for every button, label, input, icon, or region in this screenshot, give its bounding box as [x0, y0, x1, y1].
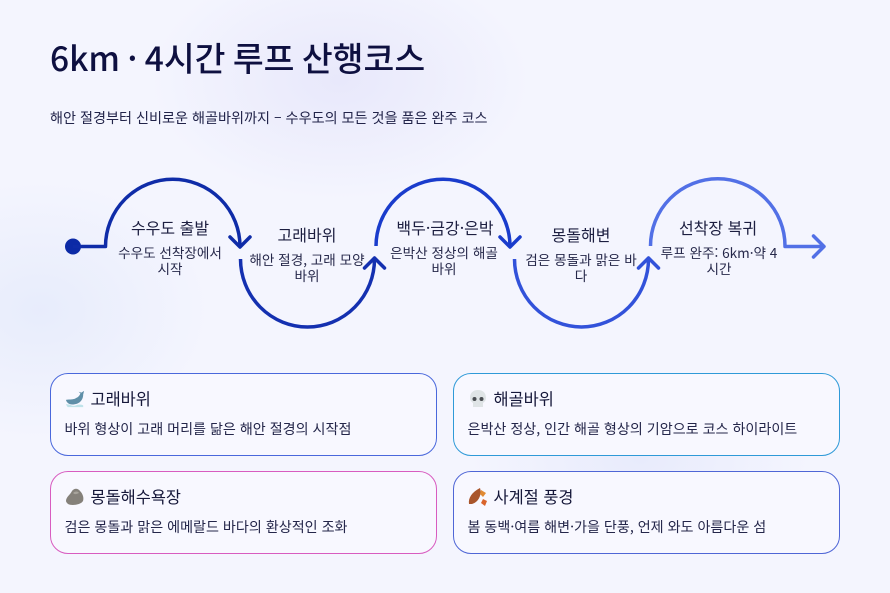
- step 4 description: [525, 248, 637, 285]
- card text: 검은 몽돌과 맑은 에메랄드 바다의 환상적인 조화: [64, 517, 348, 537]
- icon: fallen leaves: [468, 488, 487, 506]
- card: four seasons: [453, 471, 840, 554]
- step 4 heading: 몽돌해변: [552, 222, 610, 246]
- step 3 description: [390, 242, 498, 278]
- card heading: 사계절 풍경: [494, 484, 574, 508]
- step 3 heading: 백두·금강·은박: [396, 214, 494, 238]
- card text: 바위 형상이 고래 머리를 닮은 해안 절경의 시작점: [64, 419, 351, 439]
- icon: skull: [470, 390, 486, 407]
- route segment 1 with arrow: [73, 179, 250, 247]
- step 5 description: 루프 완주: 6km·약 4: [661, 242, 777, 262]
- route segment 3 with arrow: [376, 179, 520, 247]
- icon: whale: [66, 391, 84, 408]
- card heading: 고래바위: [90, 386, 151, 410]
- subtitle: 해안 절경부터 신비로운 해골바위까지 – 수우도의 모든 것을 품은 완주 코스: [50, 108, 487, 128]
- step 2 description: [249, 248, 365, 285]
- title: 6km · 4시간 루프 산행코스: [50, 32, 425, 81]
- step 2 heading: 고래바위: [278, 222, 336, 246]
- card: whale rock: [50, 373, 437, 456]
- step 1 description: [118, 242, 222, 278]
- icon: rock: [66, 488, 84, 505]
- step 5 description: 시간: [706, 258, 732, 278]
- step 1 description: 수우도 선착장에서: [118, 242, 222, 262]
- step 2 description: 해안 절경, 고래 모양: [249, 248, 365, 268]
- route segment 4 with arrow: [514, 258, 658, 327]
- step 5 description: [661, 242, 777, 278]
- step 5 heading: 선착장 복귀: [679, 214, 757, 238]
- step 3 description: 바위: [431, 258, 457, 278]
- card heading: 해골바위: [494, 386, 554, 410]
- card heading: 몽돌해수욕장: [90, 484, 181, 508]
- step 3 description: 은박산 정상의 해골: [390, 242, 498, 262]
- route segment 5 with arrow: [650, 179, 824, 257]
- card: skull rock: [453, 373, 840, 456]
- step 4 description: 검은 몽돌과 맑은 바: [525, 248, 637, 268]
- step 1 description: 시작: [157, 258, 183, 278]
- step 4 description: 다: [575, 265, 587, 285]
- card: pebble beach: [50, 471, 437, 554]
- card text: 봄 동백·여름 해변·가을 단풍, 언제 와도 아름다운 섬: [468, 517, 766, 537]
- start dot: [65, 238, 81, 254]
- step 1 heading: 수우도 출발: [131, 214, 209, 238]
- card text: 은박산 정상, 인간 해골 형상의 기암으로 코스 하이라이트: [468, 419, 797, 439]
- route segment 2 with arrow: [240, 258, 384, 327]
- step 2 description: 바위: [294, 265, 320, 285]
